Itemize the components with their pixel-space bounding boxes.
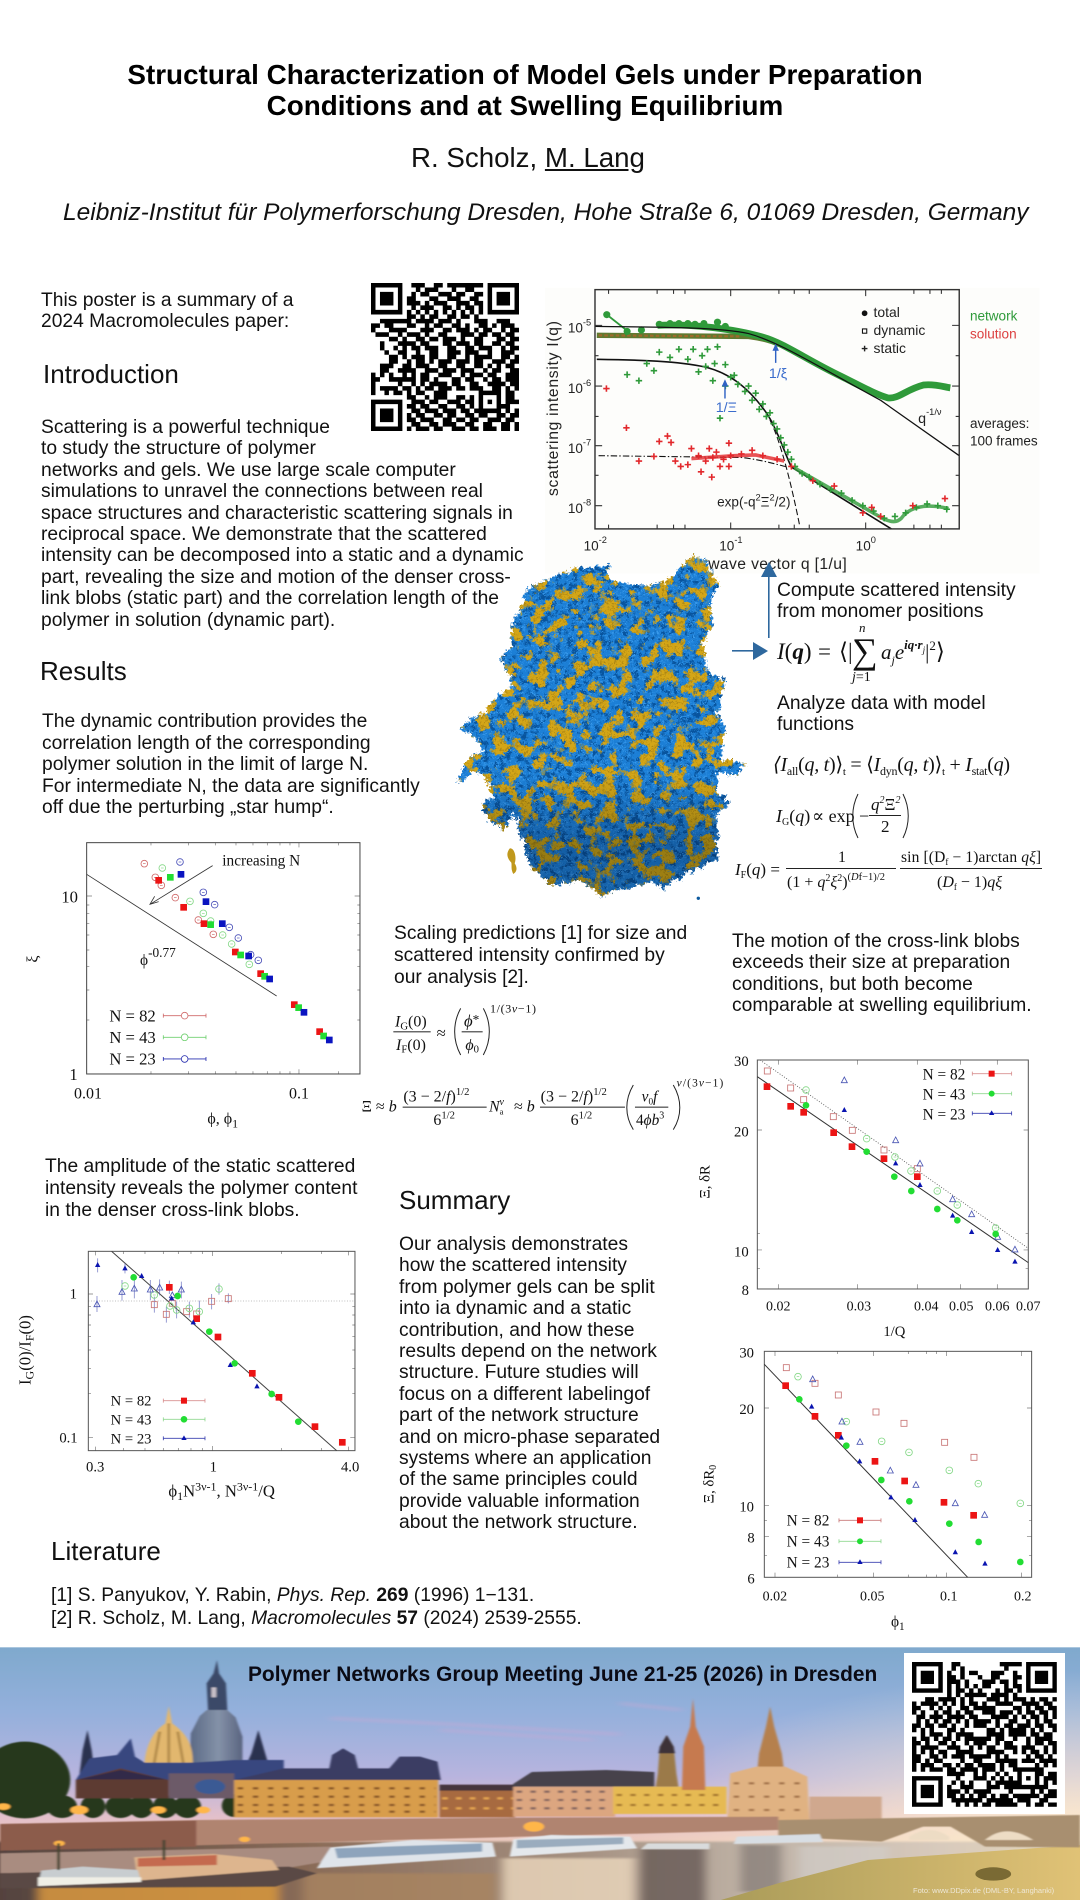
axis labels: -1 <box>734 535 743 545</box>
chart: blob size vs 1/Q: 10 <box>734 1245 749 1261</box>
title <box>127 59 923 121</box>
axis labels: 10 <box>568 320 583 335</box>
equation: Fisher-Burford function: ) <box>842 874 848 891</box>
data: dynamic and total network curves <box>595 315 959 529</box>
equation: Guinier function: Ξ <box>884 795 896 814</box>
equation: intensity ratio scaling: * <box>473 1012 480 1027</box>
equation: intensity decomposition: t <box>843 766 846 778</box>
equation: blob size scaling: 4ϕb <box>636 1112 659 1129</box>
equation: blob size scaling: 1/2 <box>441 1110 455 1121</box>
chart: blob size vs 1/Q: Ξ, δR <box>697 1165 713 1199</box>
equation: Guinier function: ( <box>789 806 795 827</box>
QR code: meeting link <box>914 1662 1055 1811</box>
equation: scattered intensity: e <box>895 640 904 664</box>
equation: scattered intensity <box>776 620 945 685</box>
heading: Introduction: Introduction <box>43 359 179 389</box>
equation: Guinier function: ∝ exp <box>812 806 855 826</box>
terrace wall <box>0 1817 778 1851</box>
heading: Results: Results <box>40 656 127 686</box>
chart: blob size vs phi: 30 <box>739 1345 754 1361</box>
fit line <box>87 874 277 996</box>
equation: Fisher-Burford function: (Df−1)/2 <box>848 872 885 883</box>
legend: N = 82 <box>787 1513 829 1530</box>
equation: Guinier function: 2 <box>895 795 900 806</box>
equation: blob size scaling <box>362 1078 724 1130</box>
equation: scattered intensity: iq·r <box>904 637 924 652</box>
equation: blob size scaling: (3 − 2/f) <box>541 1089 593 1106</box>
fit line <box>764 1364 968 1577</box>
equation: blob size scaling: Ξ ≈ b <box>362 1099 397 1116</box>
chart: correlation length vs concentration: ϕ <box>140 952 148 969</box>
bridge <box>778 1815 1080 1847</box>
legend: N = 23 <box>109 1050 156 1069</box>
chart: blob size vs phi: 0.02 <box>763 1590 787 1605</box>
equation: scattered intensity: 2 <box>929 638 936 653</box>
chart: blob size vs 1/Q: 20 <box>734 1125 749 1141</box>
legend: N = 43 <box>111 1413 151 1429</box>
chart: scattering intensity vs wave vector: 100 frames <box>970 433 1038 448</box>
text: poster note: This poster is a summary of a 2024 Macromolecules paper: <box>41 290 293 332</box>
axis labels: 10 <box>568 441 583 456</box>
data points <box>144 862 329 1040</box>
equation: Fisher-Burford function: 1 <box>838 849 846 866</box>
legend <box>109 1006 206 1069</box>
equation: Fisher-Burford function: − 1)arctan <box>949 849 1021 866</box>
legend: N = 43 <box>923 1086 966 1103</box>
text: introduction: Scattering is a powerful technique to study the structure of polymer networks and gels. We use large scale computer simulations to unravel the connections between real space structures and characteristic scattering signals in reciprocal space. We demonstrate that the scattered intensity can be decomposed into a static and a dynamic part, revealing the size and motion of the denser cross- link blobs (static part) and the correlation length of the polymer in solution (dynamic part). <box>41 417 524 631</box>
equation: blob size scaling: 6 <box>433 1112 441 1129</box>
chart: scattering intensity vs wave vector: wave vector q [1/u] <box>707 556 847 573</box>
chart: correlation length vs concentration: 1 <box>232 1116 238 1130</box>
chart: amplitude ratio vs scaled concentration: /Q <box>258 1482 275 1501</box>
equation: intensity decomposition: q) <box>994 754 1010 776</box>
legend: N = 23 <box>923 1106 966 1123</box>
equation: intensity decomposition: q, t)⟩ <box>805 754 843 776</box>
authors: R. Scholz, M. Lang <box>411 142 645 173</box>
text: cross-link motion: The motion of the cross-link blobs exceeds their size at preparation conditions, but both become comparable at swelling equilibrium. <box>732 931 1032 1016</box>
axis labels: -7 <box>583 438 591 448</box>
axis labels: 10 <box>719 538 734 553</box>
equation: Guinier function: − <box>859 806 869 826</box>
equation: Guinier function: q) <box>795 806 810 826</box>
equation: scattered intensity: a <box>881 640 892 664</box>
chart: scattering intensity vs wave vector: network <box>970 308 1018 323</box>
equation: scattered intensity: ⟨| <box>839 639 853 664</box>
chart: scattering intensity vs wave vector: 1/Ξ <box>716 400 737 416</box>
chart: amplitude ratio vs scaled concentration: (0)/I <box>16 1341 35 1371</box>
affiliation: Leibniz-Institut für Polymerforschung Dresden, Hohe Straße 6, 01069 Dresden, Germany <box>63 199 1029 226</box>
title: Structural Characterization of Model Gels under Preparation <box>127 59 923 90</box>
equation: intensity decomposition: all <box>787 764 799 778</box>
chart: scattering intensity vs wave vector: q <box>918 411 926 427</box>
equation: blob size scaling: N <box>489 1099 500 1116</box>
chart: blob size vs 1/Q: 0.07 <box>1016 1300 1040 1315</box>
chart: amplitude ratio vs scaled concentration: G <box>22 1370 36 1379</box>
equation: blob size scaling: ≈ b <box>514 1099 535 1116</box>
fit lines <box>757 1077 1028 1263</box>
chart: amplitude ratio vs scaled concentration <box>16 1251 359 1503</box>
equation: scattered intensity: n <box>859 620 866 635</box>
equation: intensity decomposition: ( <box>987 754 994 776</box>
chart: correlation length vs concentration: 1 <box>69 1065 78 1084</box>
equation: intensity decomposition: q, t)⟩ <box>904 754 942 776</box>
QR code background <box>904 1653 1065 1814</box>
chart: amplitude ratio vs scaled concentration: , N <box>217 1482 237 1501</box>
banner heading: Polymer Networks Group Meeting June 21-25 (2026) in Dresden <box>248 1663 877 1686</box>
data points <box>97 1265 342 1442</box>
chart: blob size vs phi: 8 <box>747 1530 755 1546</box>
equation: blob size scaling: ν <box>500 1097 505 1108</box>
data points <box>786 1368 1020 1564</box>
equation: blob size scaling: 3 <box>659 1110 664 1121</box>
chart: correlation length vs concentration: ξ <box>24 956 41 963</box>
increasing N arrow <box>150 866 213 904</box>
text: analyze data: Analyze data with model functions <box>777 693 986 735</box>
axis labels: 0 <box>871 535 876 545</box>
equation: scattered intensity: = <box>818 639 831 664</box>
chart: correlation length vs concentration <box>24 843 360 1130</box>
chart: blob size vs phi: ϕ <box>891 1614 899 1631</box>
chart: correlation length vs concentration: 0.01 <box>74 1085 102 1102</box>
equation: intensity decomposition: ( <box>798 754 805 776</box>
equation: intensity decomposition: t <box>942 766 945 778</box>
chart: amplitude ratio vs scaled concentration: 3ν-1 <box>195 1480 217 1494</box>
equation: scattered intensity: ⟩ <box>936 639 945 664</box>
text: references: [1] S. Panyukov, Y. Rabin, Phys. Rep. 269 (1996) 1−131. [2] R. Scholz, M. Lang, Macromolecules 57 (2024) 2539-2555. <box>51 1585 582 1629</box>
banner: Dresden skyline photo <box>0 1647 1080 1900</box>
equation: intensity ratio scaling: ≈ <box>437 1023 446 1042</box>
text: scaling predictions: Scaling predictions [1] for size and scattered intensity confirmed by our analysis [2]. <box>394 923 687 988</box>
equation: Fisher-Burford function: f <box>954 882 957 892</box>
legend: N = 43 <box>787 1534 830 1551</box>
chart: scattering intensity vs wave vector: total <box>874 304 900 320</box>
chart: blob size vs 1/Q: 0.02 <box>766 1300 790 1315</box>
equation: Fisher-Burford function <box>734 849 1042 892</box>
equation: intensity ratio scaling: 1/(3ν−1) <box>490 1002 536 1016</box>
equation: intensity ratio scaling: I <box>396 1037 401 1054</box>
equation: blob size scaling: (3 − 2/f) <box>403 1089 456 1106</box>
equation: Guinier function: 2 <box>880 795 884 806</box>
chart: blob size vs phi: Ξ, δR <box>701 1470 717 1503</box>
equation: intensity ratio scaling: (0) <box>408 1014 427 1031</box>
equation: blob size scaling: 1/2 <box>593 1087 607 1098</box>
title: Conditions and at Swelling Equilibrium <box>267 90 783 121</box>
equation: scattered intensity: j <box>922 645 926 655</box>
chart: blob size vs 1/Q: 1/Q <box>883 1324 906 1340</box>
grass bank <box>709 1845 1080 1900</box>
chart: scattering intensity vs wave vector: dynamic <box>874 322 925 338</box>
arrow: from snapshot to equation <box>732 642 768 660</box>
chart: amplitude ratio vs scaled concentration: 0.3 <box>86 1460 104 1476</box>
chart: scattering intensity vs wave vector: Ξ <box>761 494 770 509</box>
equation: intensity decomposition: ( <box>897 754 904 776</box>
chart: blob size vs phi: 0.05 <box>860 1590 884 1605</box>
axis labels: 10 <box>568 501 583 516</box>
chart: blob size vs phi <box>701 1345 1032 1633</box>
chart: blob size vs phi: 1 <box>899 1621 905 1633</box>
chart: blob size vs phi: 0 <box>708 1465 719 1470</box>
equation: Fisher-Burford function: f <box>945 857 948 867</box>
heading: Summary: Summary <box>399 1185 510 1215</box>
legend: N = 82 <box>923 1066 965 1083</box>
axis labels: -6 <box>583 378 591 388</box>
equation: scattered intensity: j <box>890 653 896 667</box>
chart: correlation length vs concentration: ϕ, ϕ <box>207 1110 232 1127</box>
chart: blob size vs 1/Q: 0.06 <box>985 1300 1009 1315</box>
palace buildings <box>76 1768 169 1798</box>
chart: scattering intensity vs wave vector: 2 <box>769 493 775 503</box>
arrow: up to scattering plot <box>761 562 777 638</box>
equation: intensity ratio scaling: (0) <box>407 1037 426 1054</box>
text: amplitude: The amplitude of the static scattered intensity reveals the polymer content in the denser cross-link blobs. <box>45 1156 357 1221</box>
chart: scattering intensity vs wave vector: 2 <box>756 493 761 503</box>
chart: amplitude ratio vs scaled concentration: I <box>16 1379 35 1385</box>
chart: blob size vs phi: 6 <box>747 1571 755 1587</box>
equation: scattered intensity: j=1 <box>850 670 871 685</box>
chart: blob size vs 1/Q: 0.03 <box>847 1300 871 1315</box>
chart: blob size vs phi: 20 <box>739 1402 754 1418</box>
blue arrows <box>722 344 779 399</box>
axis labels: 10 <box>584 538 599 553</box>
legend: N = 82 <box>111 1394 151 1410</box>
photo credit: Foto: www.DDpix.de (DML-BY, Langhanki) <box>913 1886 1055 1895</box>
equation: Guinier function <box>775 794 908 838</box>
legend <box>923 1066 1012 1123</box>
equation: intensity decomposition: I <box>965 754 972 776</box>
text: results: The dynamic contribution provides the correlation length of the corresponding polymer solution in the limit of large N. For intermediate N, the data are significantly off due the perturbing „star hump“. <box>42 711 420 818</box>
error bars <box>97 1258 228 1323</box>
equation: Fisher-Burford function: qξ] <box>1021 849 1041 866</box>
axis labels: -8 <box>583 498 591 508</box>
church towers <box>656 1735 678 1787</box>
axis labels: -2 <box>599 535 607 545</box>
legend <box>862 310 867 316</box>
equation: blob size scaling: 0 <box>648 1097 653 1107</box>
equation: Fisher-Burford function: (1 + q <box>787 874 825 891</box>
equation: Guinier function: I <box>776 806 782 826</box>
chart: amplitude ratio vs scaled concentration: (0) <box>16 1315 35 1335</box>
simulation snapshot: polymer network <box>457 555 745 900</box>
equation: blob size scaling: ν/(3ν−1) <box>677 1078 724 1090</box>
chart: blob size vs phi: 0.1 <box>940 1590 957 1605</box>
chart: scattering intensity vs wave vector: averages: <box>970 416 1029 431</box>
equation: blob size scaling: 6 <box>571 1112 579 1129</box>
equation: Fisher-Burford function: 2 <box>825 873 830 884</box>
equation: intensity ratio scaling: 0 <box>474 1045 479 1056</box>
equation: blob size scaling: a <box>500 1106 504 1116</box>
equation: scattered intensity: | <box>925 640 929 664</box>
chart: scattering intensity vs wave vector: exp(-q <box>717 494 756 509</box>
equation: Fisher-Burford function: q) = <box>752 860 780 879</box>
equation: intensity decomposition: stat <box>972 764 988 778</box>
chart: scattering intensity vs wave vector: static <box>874 340 906 356</box>
heading: Literature: Literature <box>51 1536 161 1566</box>
chart: correlation length vs concentration: 0.1 <box>289 1085 309 1102</box>
equation: blob size scaling: f <box>653 1089 660 1106</box>
equation: intensity ratio scaling: F <box>401 1045 407 1056</box>
chart: amplitude ratio vs scaled concentration: 4.0 <box>341 1460 359 1476</box>
axis labels: 10 <box>568 381 583 396</box>
chart: blob size vs 1/Q: 8 <box>742 1283 749 1299</box>
chart: blob size vs phi: 10 <box>739 1500 754 1516</box>
equation: scattered intensity: I(q) <box>776 639 812 664</box>
chart: amplitude ratio vs scaled concentration: 0.1 <box>59 1430 78 1446</box>
equation: intensity decomposition: I <box>874 754 880 776</box>
chart: blob size vs 1/Q: 0.05 <box>949 1300 973 1315</box>
lights <box>0 1803 544 1846</box>
chart: blob size vs 1/Q <box>697 1054 1040 1340</box>
chart: scattering intensity vs wave vector: /2) <box>775 494 790 509</box>
equation: blob size scaling: v <box>642 1089 648 1106</box>
equation: Fisher-Burford function: I <box>735 860 741 879</box>
legend: N = 82 <box>109 1006 156 1025</box>
equation: Fisher-Burford function: ( <box>746 860 752 879</box>
equation: intensity ratio scaling: G <box>400 1021 408 1032</box>
river <box>0 1842 1080 1900</box>
axis labels: 10 <box>856 538 871 553</box>
equation: intensity decomposition: + <box>945 754 966 776</box>
data points <box>767 1071 1015 1262</box>
chart: blob size vs phi: 0.2 <box>1014 1590 1031 1605</box>
trees <box>0 1742 247 1818</box>
equation: Fisher-Burford function: qξ <box>987 874 1002 891</box>
equation: intensity decomposition: ⟨I <box>773 754 787 776</box>
equation: intensity decomposition: dyn <box>880 764 898 778</box>
equation: intensity ratio scaling <box>393 1002 536 1056</box>
chart: amplitude ratio vs scaled concentration: 3ν-1 <box>237 1480 258 1494</box>
equation: Fisher-Burford function: 2 <box>837 873 842 884</box>
chart: correlation length vs concentration: 10 <box>61 888 78 907</box>
equation: blob size scaling: 1/2 <box>579 1110 592 1121</box>
text: summary: Our analysis demonstrates how the scattered intensity from polymer gels can be split into ia dynamic and a static contribution, and how these results depend on the network structure. Future studies will focus on a different labelingof part of the network structure and on micro-phase separated systems where an application of the same principles could provide valuable information about the network structure. <box>399 1234 660 1533</box>
chart: correlation length vs concentration: -0.77 <box>148 945 176 960</box>
equation: intensity ratio scaling: I <box>395 1014 400 1031</box>
Frauenkirche <box>207 1660 227 1710</box>
equation: Guinier function: 2 <box>881 817 890 836</box>
quay <box>0 1847 331 1873</box>
equation: Fisher-Burford function: ξ <box>830 874 837 891</box>
chart: scattering intensity vs wave vector: scattering intensity I(q) <box>545 321 562 496</box>
equation: intensity decomposition: = ⟨ <box>846 754 874 776</box>
chart: scattering intensity vs wave vector: -1/ν <box>926 407 942 417</box>
chart: amplitude ratio vs scaled concentration: N <box>183 1482 195 1501</box>
chart: amplitude ratio vs scaled concentration: 1 <box>177 1489 183 1503</box>
legend <box>111 1394 205 1447</box>
equation: intensity ratio scaling: ϕ <box>464 1012 473 1031</box>
legend: N = 43 <box>109 1028 156 1047</box>
chart: blob size vs 1/Q: 0.04 <box>914 1300 938 1315</box>
text: compute intensity: Compute scattered intensity from monomer positions <box>777 580 1016 622</box>
equation: Guinier function: G <box>782 817 789 828</box>
chart: amplitude ratio vs scaled concentration: F <box>22 1334 36 1341</box>
legend: N = 23 <box>111 1431 151 1447</box>
equation: Fisher-Burford function: − 1) <box>957 874 987 891</box>
legend <box>787 1513 881 1571</box>
chart: blob size vs 1/Q: 30 <box>734 1054 749 1070</box>
chart: amplitude ratio vs scaled concentration: 1 <box>70 1286 77 1302</box>
equation: scattered intensity: ∑ <box>852 631 878 671</box>
QR code: paper link <box>371 285 523 429</box>
fit line <box>112 1251 337 1451</box>
chart: scattering intensity vs wave vector: 1/ξ <box>769 366 788 382</box>
equation: Guinier function: q <box>871 795 880 814</box>
equation: intensity ratio scaling: ϕ <box>465 1037 474 1054</box>
equation: Fisher-Burford function: F <box>741 870 747 881</box>
equation: Fisher-Burford function: (D <box>937 874 954 891</box>
chart: amplitude ratio vs scaled concentration: ϕ <box>168 1482 177 1501</box>
chart: amplitude ratio vs scaled concentration: 1 <box>210 1460 217 1476</box>
chart: correlation length vs concentration: increasing N <box>222 853 300 870</box>
equation: blob size scaling: 1/2 <box>456 1087 469 1098</box>
chart: scattering intensity vs wave vector: solution <box>970 327 1017 342</box>
boats <box>38 1834 823 1886</box>
legend: N = 23 <box>787 1554 830 1571</box>
axis labels: -5 <box>583 317 591 327</box>
equation: Fisher-Burford function: sin [(D <box>901 849 945 866</box>
chart: scattering intensity vs wave vector <box>545 288 1040 574</box>
axis labels <box>568 317 876 553</box>
